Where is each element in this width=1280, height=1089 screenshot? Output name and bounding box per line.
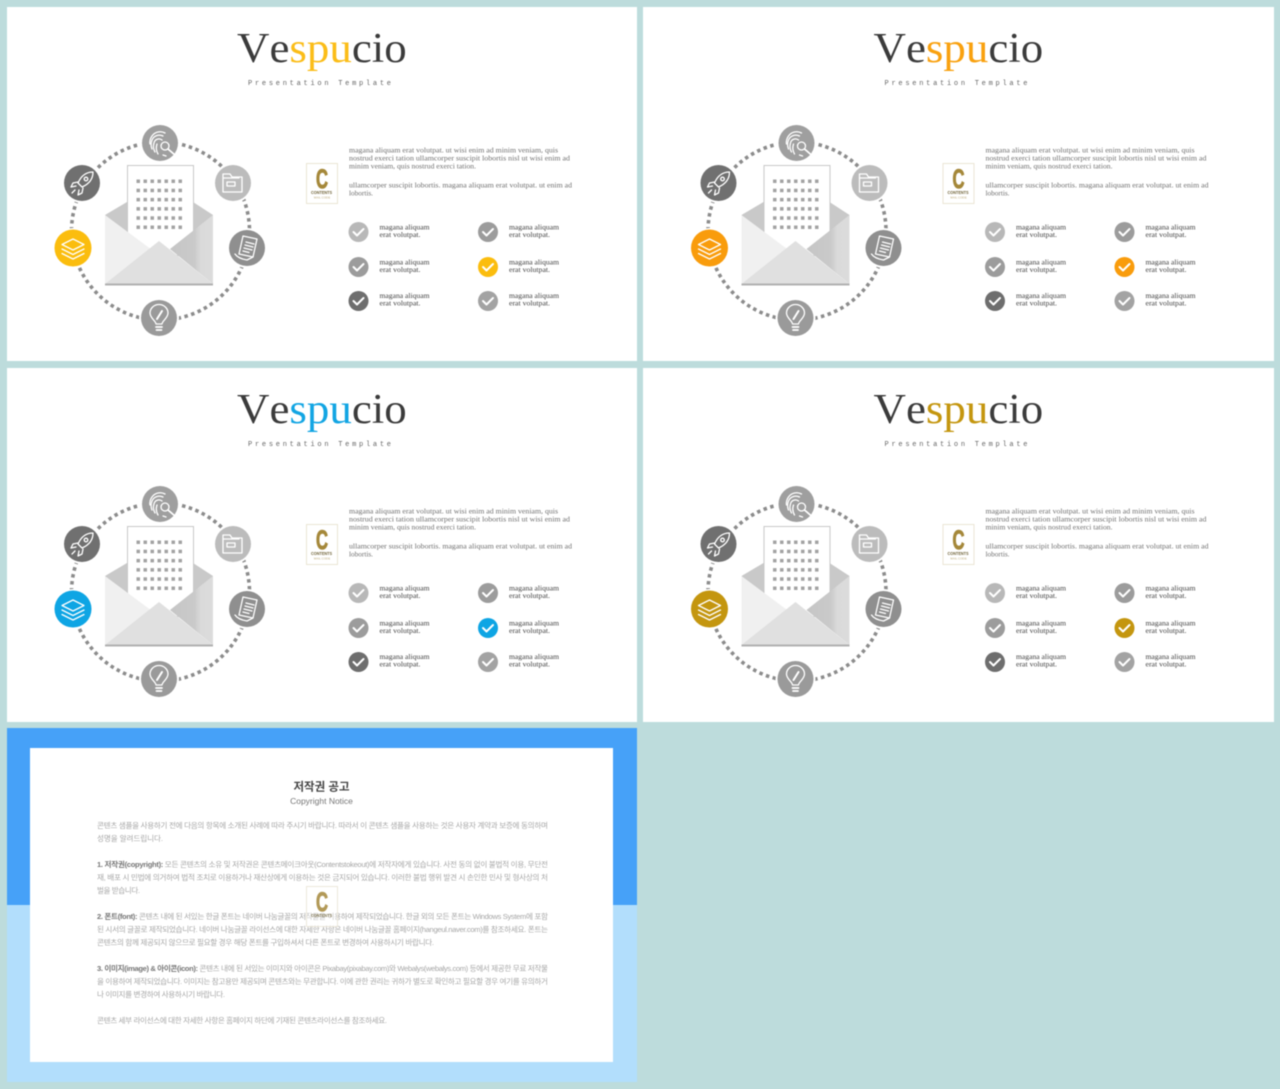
subtitle: Presentation Template <box>884 80 1028 88</box>
icon: document <box>864 589 904 629</box>
checklist: magana aliquam <box>509 652 559 661</box>
checklist <box>348 222 559 311</box>
icon: light bulb <box>776 298 816 338</box>
section 3 image and icon: 나 이미지를 변경하여 사용하시기 바랍니다. <box>97 989 225 999</box>
section 2 font: 2. 폰트(font): 콘텐츠 내에 된 서있는 한글 폰트는 네이버 나눔글꼴의 저작물을 이용하여 제작되었습니다. 한글 외의 모든 폰트는 Windows System에 포함 <box>97 911 548 921</box>
text block: ullamcorper suscipit lobortis. magana aliquam erat volutpat. ut enim ad <box>349 180 572 190</box>
icon: light bulb <box>776 659 816 699</box>
icon: document <box>864 228 904 268</box>
section 1 copyright <box>97 859 548 895</box>
logo: C <box>952 525 964 555</box>
envelope illustration <box>105 166 213 286</box>
checklist: erat volutpat. <box>509 626 550 635</box>
logo watermark: C <box>316 887 328 917</box>
logo <box>943 524 974 564</box>
title: Vespucio <box>237 25 407 72</box>
logo <box>943 164 974 204</box>
text block: nostrud exerci tation ullamcorper suscipit lobortis nisl ut wisi enim ad <box>986 514 1207 524</box>
logo: MAIL CODE <box>314 196 330 200</box>
checklist: magana aliquam <box>1146 222 1196 232</box>
text block: minim veniam, quis nostrud exerci tation. <box>986 522 1113 532</box>
logo <box>306 524 338 564</box>
envelope illustration <box>742 166 850 286</box>
text block: lobortis. <box>349 550 373 558</box>
checklist: erat volutpat. <box>509 298 550 308</box>
checklist: magana aliquam <box>380 291 430 300</box>
checklist: magana aliquam <box>1146 618 1196 628</box>
section 2 font: 콘텐츠의 함께 제공되지 않으므로 필요할 경우 해당 폰트를 구입하셔서 다른 폰트로 변경하여 사용하시기 바랍니다. <box>97 937 434 947</box>
logo: MAIL CODE <box>950 556 967 560</box>
icon: fingerprint <box>776 484 816 524</box>
icon: layers accent <box>690 589 730 629</box>
logo: CONTENTS <box>948 551 968 556</box>
text block: magana aliquam erat volutpat. ut wisi enim ad minim veniam, quis <box>349 146 558 154</box>
section 3 image and icon <box>97 963 548 999</box>
checklist: erat volutpat. <box>380 298 421 308</box>
license note: 콘텐츠 세부 라이선스에 대한 자세한 사항은 홈페이지 하단에 기재된 콘텐츠라이선스를 참조하세요. <box>97 1015 387 1025</box>
checklist: erat volutpat. <box>509 230 550 239</box>
text block: lobortis. <box>986 550 1010 558</box>
text block: magana aliquam erat volutpat. ut wisi enim ad minim veniam, quis <box>349 506 558 516</box>
section 2 font: 된 시서의 글꼴로 제작되었습니다. 네이버 나눔글꼴 라이선스에 대한 자세한 사항은 네이버 나눔글꼴 홈페이지(hangeul.naver.com)를 참조하세요. 폰트는 <box>97 924 548 934</box>
text block: ullamcorper suscipit lobortis. magana aliquam erat volutpat. ut enim ad <box>986 542 1209 550</box>
checklist: magana aliquam <box>380 652 430 661</box>
icon: fingerprint <box>140 123 180 163</box>
text block <box>986 506 1209 558</box>
checklist: erat volutpat. <box>1146 591 1187 600</box>
section 1 copyright: 1. 저작권(copyright): 모든 콘텐츠의 소유 및 저작권은 콘텐츠메이크아웃(Contentstokeout)에 저작자에게 있습니다. 사전 동의 없이 불법적 이용, 무단전 <box>97 859 548 869</box>
checklist: magana aliquam <box>1016 652 1066 661</box>
logo: CONTENTS <box>311 190 332 195</box>
dotted ring <box>72 142 250 320</box>
section 2 font <box>97 911 548 947</box>
logo: C <box>316 164 328 194</box>
intro text: 콘텐츠 샘플을 사용하기 전에 다음의 항목에 소개된 사례에 따라 주시기 바랍니다. 따라서 이 콘텐츠 샘플을 사용하는 것은 사용자 계약과 보증에 동의하며 <box>97 820 548 830</box>
text block: nostrud exerci tation ullamcorper suscipit lobortis nisl ut wisi enim ad <box>986 154 1207 162</box>
dotted ring <box>708 142 886 320</box>
logo: C <box>952 164 964 194</box>
checklist: erat volutpat. <box>380 626 421 635</box>
logo: MAIL CODE <box>314 556 330 560</box>
heading: 저작권 공고 <box>293 780 350 794</box>
checklist <box>985 222 1196 311</box>
checklist: erat volutpat. <box>1146 660 1187 668</box>
text block <box>986 146 1209 198</box>
checklist: magana aliquam <box>509 291 559 300</box>
checklist: erat volutpat. <box>1016 265 1057 274</box>
checklist: magana aliquam <box>509 258 559 266</box>
checklist: erat volutpat. <box>380 591 421 600</box>
icon: rocket <box>698 163 738 203</box>
checklist: erat volutpat. <box>509 265 550 274</box>
text block: minim veniam, quis nostrud exerci tation. <box>349 162 476 170</box>
section 3 image and icon: 을 이용하여 제작되었습니다. 이미지는 참고용만 제공되며 콘텐츠와는 무관합니다. 이에 관한 권리는 귀하가 별도로 확인하고 필요할 경우 여기를 유의하거 <box>97 976 548 986</box>
checklist: magana aliquam <box>1146 258 1196 266</box>
checklist: magana aliquam <box>380 618 430 628</box>
dotted ring <box>72 503 250 681</box>
checklist <box>985 583 1196 672</box>
checklist: magana aliquam <box>1016 618 1066 628</box>
checklist: magana aliquam <box>1016 258 1066 266</box>
logo: CONTENTS <box>311 551 332 556</box>
text block: minim veniam, quis nostrud exerci tation. <box>986 162 1113 170</box>
checklist <box>348 583 559 672</box>
icon: rocket <box>698 524 738 564</box>
subheading: Copyright Notice <box>290 796 353 806</box>
checklist: erat volutpat. <box>1016 298 1057 308</box>
section 1 copyright: 재, 배포 시 민법에 의거하여 법적 조치로 이용하거나 재산상에게 이용하는 것은 금지되어 있습니다. 이러한 불법 행위 발견 시 손인한 민사 및 형사상의 처 <box>97 872 548 882</box>
logo: C <box>316 525 328 555</box>
checklist: erat volutpat. <box>380 230 421 239</box>
icon: folder <box>850 524 890 564</box>
panel: copyright notice <box>7 728 637 1082</box>
checklist: erat volutpat. <box>1146 298 1187 308</box>
checklist: magana aliquam <box>1146 652 1196 661</box>
checklist: magana aliquam <box>1146 291 1196 300</box>
checklist: erat volutpat. <box>1016 626 1057 635</box>
logo: MAIL CODE <box>950 196 967 200</box>
checklist: erat volutpat. <box>509 591 550 600</box>
checklist: erat volutpat. <box>1146 265 1187 274</box>
panel: slide 3 blue <box>7 368 637 722</box>
text block: lobortis. <box>986 188 1010 198</box>
envelope illustration <box>742 526 850 646</box>
icon: rocket <box>62 524 102 564</box>
checklist: magana aliquam <box>380 222 430 232</box>
checklist: magana aliquam <box>1016 584 1066 592</box>
dotted ring <box>708 503 886 681</box>
title: Vespucio <box>874 25 1043 72</box>
subtitle: Presentation Template <box>884 441 1028 449</box>
checklist: erat volutpat. <box>1146 230 1187 239</box>
panel: slide 4 gold <box>643 368 1274 722</box>
checklist: erat volutpat. <box>1016 591 1057 600</box>
text block: magana aliquam erat volutpat. ut wisi enim ad minim veniam, quis <box>986 146 1195 154</box>
icon: layers accent <box>690 228 730 268</box>
text block <box>349 506 572 558</box>
checklist: magana aliquam <box>1016 291 1066 300</box>
icon: folder <box>850 163 890 203</box>
icon: document <box>227 589 267 629</box>
text block: nostrud exerci tation ullamcorper suscipit lobortis nisl ut wisi enim ad <box>349 514 570 524</box>
logo watermark: CONTENTS <box>311 913 332 918</box>
icon: light bulb <box>139 298 179 338</box>
text block: ullamcorper suscipit lobortis. magana aliquam erat volutpat. ut enim ad <box>349 542 572 550</box>
intro text <box>97 820 548 843</box>
panel: slide 1 yellow <box>7 7 637 361</box>
icon: light bulb <box>139 659 179 699</box>
title: Vespucio <box>874 386 1043 433</box>
icon: rocket <box>62 163 102 203</box>
logo: CONTENTS <box>948 190 968 195</box>
checklist: erat volutpat. <box>1016 230 1057 239</box>
checklist: magana aliquam <box>509 584 559 592</box>
checklist: erat volutpat. <box>1016 660 1057 668</box>
subtitle: Presentation Template <box>248 441 391 449</box>
checklist: erat volutpat. <box>380 265 421 274</box>
logo watermark <box>306 886 338 926</box>
text block <box>349 146 572 198</box>
text block: nostrud exerci tation ullamcorper suscipit lobortis nisl ut wisi enim ad <box>349 154 570 162</box>
icon: folder <box>213 524 253 564</box>
icon: layers accent <box>53 589 93 629</box>
title: Vespucio <box>237 386 407 433</box>
icon: folder <box>213 163 253 203</box>
checklist: erat volutpat. <box>380 660 421 668</box>
envelope illustration <box>105 526 213 646</box>
text block: minim veniam, quis nostrud exerci tation. <box>349 522 476 532</box>
icon: document <box>227 228 267 268</box>
icon: fingerprint <box>140 484 180 524</box>
icon: fingerprint <box>776 123 816 163</box>
checklist: magana aliquam <box>509 618 559 628</box>
checklist: magana aliquam <box>509 222 559 232</box>
checklist: erat volutpat. <box>509 660 550 668</box>
logo <box>306 164 338 204</box>
text block: lobortis. <box>349 188 373 198</box>
checklist: erat volutpat. <box>1146 626 1187 635</box>
icon: layers accent <box>53 228 93 268</box>
section 3 image and icon: 3. 이미지(image) & 아이콘(icon): 콘텐츠 내에 된 서있는 이미지와 아이콘은 Pixabay(pixabay.com)와 Webalys(webalys.com) 등에서 제공한 무료 저작물 <box>97 963 548 973</box>
panel: slide 2 orange <box>643 7 1274 361</box>
section 1 copyright: 벌을 받습니다. <box>97 885 140 895</box>
checklist: magana aliquam <box>380 584 430 592</box>
text block: ullamcorper suscipit lobortis. magana aliquam erat volutpat. ut enim ad <box>986 180 1209 190</box>
checklist: magana aliquam <box>1146 584 1196 592</box>
text block: magana aliquam erat volutpat. ut wisi enim ad minim veniam, quis <box>986 506 1195 516</box>
intro text: 성명을 알려드립니다. <box>97 833 163 843</box>
checklist: magana aliquam <box>1016 222 1066 232</box>
checklist: magana aliquam <box>380 258 430 266</box>
subtitle: Presentation Template <box>248 80 391 88</box>
